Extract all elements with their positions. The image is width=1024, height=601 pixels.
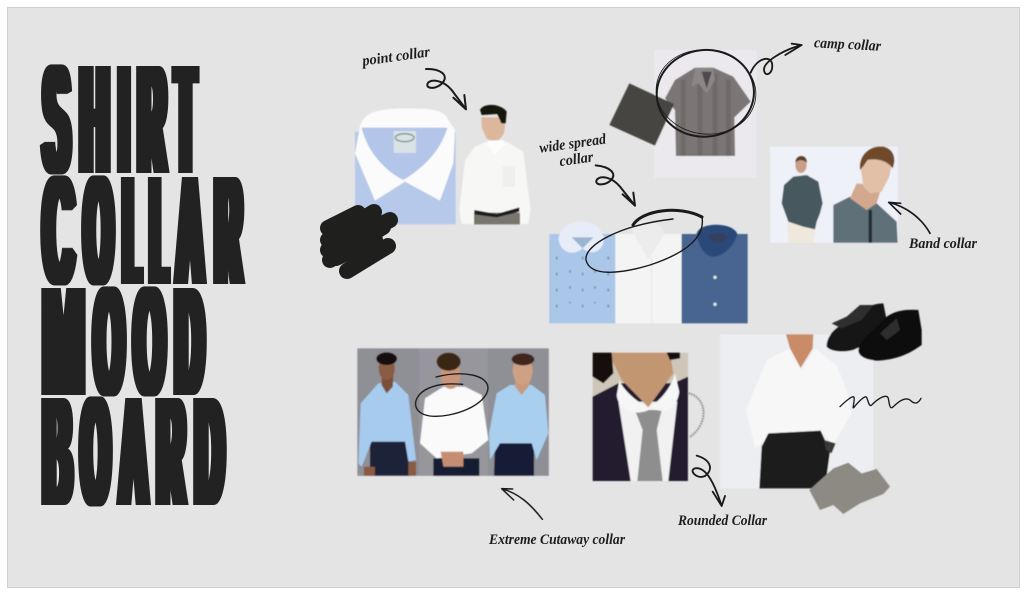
- photo: rounded club collar with tie: [593, 353, 688, 481]
- title: C: [44, 143, 74, 317]
- grey paint smear: [809, 463, 890, 514]
- title: L: [124, 143, 140, 317]
- squiggle line: [840, 396, 921, 408]
- swatch: dark fabric: [609, 83, 674, 146]
- label: rounded collar: Rounded Collar: [677, 513, 767, 529]
- title: S: [44, 32, 69, 206]
- wide spread collar shirts: [549, 165, 748, 323]
- shirt: white button down: [615, 222, 681, 323]
- title: B: [44, 364, 71, 538]
- bead necklace detail: [688, 393, 704, 437]
- label: wide spread collar: [538, 131, 610, 173]
- label: band collar: Band collar: [908, 236, 977, 252]
- photo: man in white point collar shirt: [459, 105, 531, 224]
- title: L: [151, 143, 167, 317]
- title: A: [120, 364, 147, 538]
- scribble ellipse on wide spread collars: [586, 210, 702, 272]
- white shirt outfit group: [688, 303, 922, 514]
- label: camp collar: camp collar: [814, 35, 882, 55]
- arrow: to extreme cutaway photo: [502, 489, 542, 519]
- title: O: [134, 254, 164, 428]
- title: O: [82, 364, 109, 538]
- photo: folded shirt with white point collar: [355, 108, 456, 224]
- camp and band collar group: [609, 43, 930, 243]
- label: extreme cutaway collar: Extreme Cutaway collar: [488, 532, 625, 548]
- title: I: [120, 32, 128, 206]
- label: wide spread collar: collar: [558, 149, 594, 170]
- point collar group: [355, 69, 531, 224]
- title: T: [176, 32, 195, 206]
- photo: camp collar shirt: [654, 50, 757, 178]
- title: A: [177, 143, 203, 317]
- photo: man in white shirt and black trousers: [720, 334, 873, 488]
- title: H: [81, 32, 108, 206]
- arrow: to band collar shirt: [889, 202, 930, 233]
- arrow: rounded collar: [693, 456, 725, 506]
- title: O: [85, 143, 112, 317]
- title: O: [95, 254, 124, 428]
- photo: three men in cutaway collar shirts: [357, 348, 549, 476]
- black brush stroke: [328, 212, 390, 271]
- arrow: to camp collar label: [751, 44, 802, 74]
- arrow: to wide spread shirts: [596, 165, 635, 206]
- text: R: [216, 143, 241, 317]
- title: R: [158, 364, 184, 538]
- label: point collar: point collar: [359, 44, 431, 70]
- text: D: [196, 364, 223, 538]
- title: [43, 32, 241, 538]
- icon: black platform loafers: [827, 303, 922, 361]
- shirt: blue with white round collar: [549, 222, 615, 323]
- photo: band collar shirt: [770, 146, 898, 243]
- scribble circle around camp collar: [651, 43, 761, 142]
- title: M: [43, 254, 84, 428]
- label: wide spread collar: wide spread: [538, 131, 607, 157]
- shirt: navy band collar: [682, 225, 748, 323]
- extreme cutaway group: [357, 348, 688, 519]
- scribble ellipse on cutaway collar: [416, 374, 488, 416]
- title: D: [176, 254, 203, 428]
- arrow: to point collar man: [426, 69, 466, 109]
- title: R: [139, 32, 165, 206]
